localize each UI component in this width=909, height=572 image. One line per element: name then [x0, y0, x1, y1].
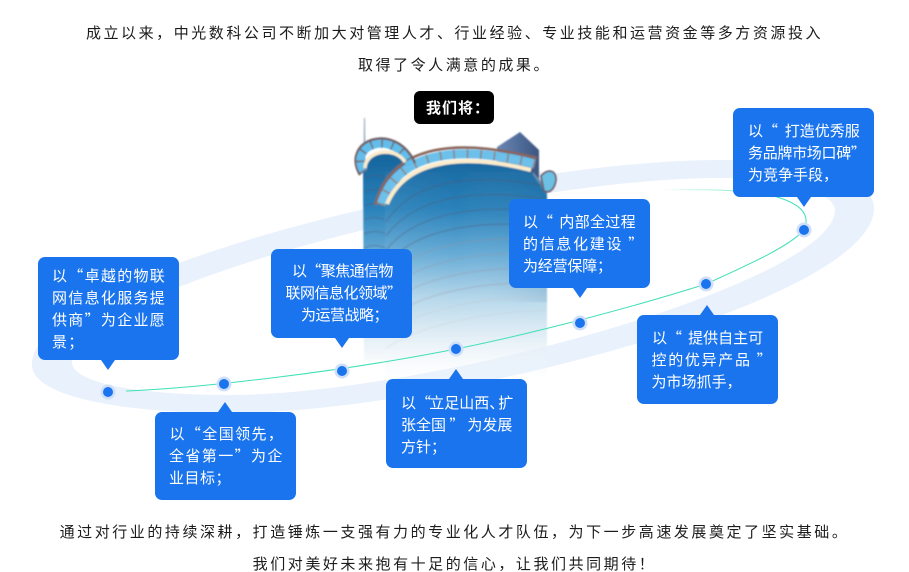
callout: target — [155, 412, 296, 500]
heading badge — [414, 91, 494, 124]
timeline dots — [100, 222, 812, 400]
left roof ring — [356, 139, 415, 175]
closing text — [60, 521, 849, 572]
callout: guideline — [386, 379, 527, 468]
main roof ring — [375, 148, 537, 205]
callout: internal process: 为经营保障； — [523, 255, 612, 276]
callout: strategy: 为运营战略； — [301, 304, 388, 325]
callout: internal process: 以“ 内部全过程 — [523, 211, 636, 232]
callout: guideline: 方针； — [401, 436, 446, 456]
callout: vision: 以“卓越的物联 — [52, 265, 166, 286]
intro text: 取得了令人满意的成果。 — [358, 54, 551, 75]
callout: vision — [38, 257, 179, 360]
callout: target: 业目标； — [169, 467, 231, 488]
callout: strategy: 联网信息化领域” — [286, 282, 402, 303]
callout: service brand: 以“ 打造优秀服 — [748, 120, 860, 141]
callout: service brand — [733, 108, 874, 197]
intro text — [86, 22, 823, 75]
callout: strategy: 以“聚焦通信物 — [292, 260, 393, 281]
callout: guideline: 张全国 ”为发展 — [401, 414, 512, 434]
timeline curve — [126, 197, 806, 391]
heading badge: 我们将： — [426, 97, 490, 118]
callout: strategy — [271, 249, 412, 338]
closing text: 通过对行业的持续深耕，打造锤炼一支强有力的专业化人才队伍，为下一步高速发展奠定了坚实基础。 — [60, 521, 849, 542]
callout: service brand: 务品牌市场口碑” — [748, 142, 866, 163]
callout: guideline: 以“立足山西、扩 — [401, 392, 513, 412]
callout: vision: 供商”为企业愿 — [52, 309, 166, 330]
callout: vision: 景； — [52, 331, 85, 352]
callout: products: 控的优异产品 ” — [652, 349, 773, 370]
callout: internal process — [509, 199, 650, 288]
tower — [356, 118, 556, 382]
orbit ring — [32, 160, 874, 413]
callout: products — [637, 315, 778, 404]
callout: products: 为市场抓手， — [652, 371, 742, 392]
right roof ring — [541, 171, 556, 192]
callout: target: 以“全国领先， — [170, 423, 284, 444]
callout: products: 以“ 提供自主可 — [652, 327, 763, 348]
callout: vision: 网信息化服务提 — [52, 287, 166, 308]
callout: internal process: 的信息化建设 ” — [523, 233, 645, 254]
callout: target: 全省第一”为企 — [169, 445, 284, 466]
callout: service brand: 为竞争手段， — [748, 164, 838, 185]
intro text: 成立以来，中光数科公司不断加大对管理人才、行业经验、专业技能和运营资金等多方资源投入 — [86, 22, 823, 43]
